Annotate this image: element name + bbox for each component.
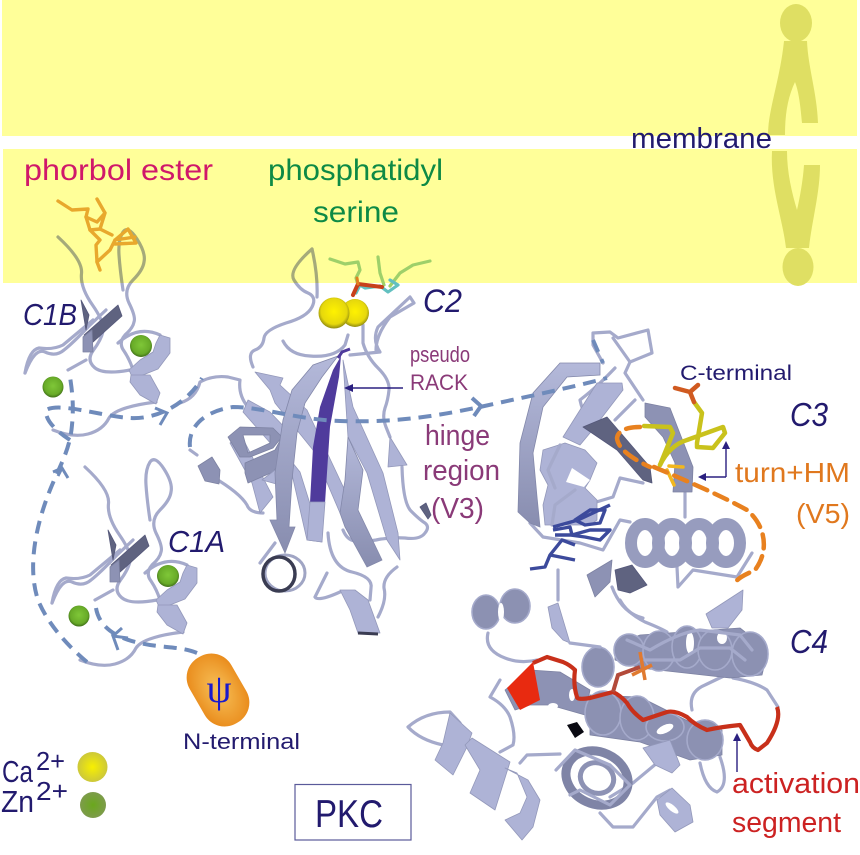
central strand lower: [343, 360, 400, 560]
N-terminal pseudosubstrate capsule: ψ: [206, 666, 232, 711]
activation segment: [507, 652, 778, 750]
C-terminal tail: [644, 385, 725, 485]
domain C3: [518, 330, 693, 569]
kinase N-lobe coils: [540, 443, 597, 525]
bottom end-on helix: [556, 741, 637, 815]
label: activation segment: [732, 768, 860, 839]
label: hinge region V3: [423, 420, 500, 525]
label: hinge region V3: hinge: [425, 420, 490, 452]
domain C1B: [25, 230, 170, 435]
label: C2: C2: [423, 283, 462, 319]
arrow strand right: [388, 437, 407, 467]
top left helix: [472, 589, 600, 647]
label: phosphatidyl serine: phosphatidyl: [268, 154, 443, 187]
legend: Ca and Zn ions: 2+: [36, 746, 65, 776]
turn and HM pointer arrows: [698, 441, 730, 481]
zinc ions: [68, 565, 179, 626]
dark strand: [583, 417, 652, 483]
left lower helix: [435, 713, 540, 840]
label: phorbol ester: phorbol ester: [24, 154, 213, 187]
phospholipid head groups and tails: [768, 4, 820, 286]
label: pseudo RACK: [410, 342, 470, 395]
black strand: [567, 722, 584, 738]
left helix: [228, 427, 282, 513]
label: C-terminal: C-terminal: [680, 362, 792, 385]
arched strand: [270, 356, 338, 553]
label: turn+HM V5: [735, 457, 850, 529]
C1A domain: [52, 460, 197, 665]
N-terminal pseudosubstrate capsule: [178, 645, 258, 735]
label: C1B: C1B: [23, 297, 77, 332]
big alpha helix: [631, 524, 740, 562]
bottom coil ring: [263, 555, 305, 591]
membrane bands: [2, 0, 857, 283]
ATP ligand: [530, 505, 610, 569]
phosphatidylserine molecule: [330, 257, 430, 295]
legend: Ca and Zn ions: 2+: [36, 776, 68, 806]
label: turn+HM V5: turn+HM: [735, 457, 850, 488]
legend: Ca and Zn ions: [1, 746, 108, 819]
bottom coil: [340, 590, 380, 634]
label: phosphatidyl serine: [268, 154, 443, 229]
label: N-terminal: N-terminal: [183, 729, 300, 754]
label: phosphatidyl serine: serine: [313, 196, 399, 229]
calcium ions: [318, 298, 369, 328]
upper helix: [582, 590, 768, 687]
label: turn+HM V5: (V5): [796, 498, 850, 529]
label: activation segment: activation: [732, 768, 860, 800]
lower right helix: [643, 740, 693, 832]
label: membrane: membrane: [631, 123, 772, 155]
label: C4: C4: [790, 623, 828, 660]
PKC title box: PKC: [315, 793, 383, 836]
label: pseudo RACK: RACK: [410, 370, 468, 395]
domain C2: [180, 249, 431, 634]
pseudo RACK strand: [310, 356, 341, 503]
PKC title box: [295, 784, 411, 840]
legend: Ca and Zn ions: Zn: [1, 784, 34, 819]
middle alpha helix: [505, 670, 723, 760]
small strand: [198, 457, 220, 484]
label: C3: C3: [790, 396, 829, 433]
zinc ions: [42, 335, 152, 398]
label: hinge region V3: (V3): [431, 493, 484, 525]
left rear strand: [255, 372, 348, 513]
phorbol ester molecule: [58, 199, 136, 270]
label: activation segment: segment: [732, 807, 841, 839]
lower strands: [288, 457, 322, 542]
turn strand: [645, 403, 693, 492]
label: hinge region V3: region: [423, 455, 500, 487]
flexible linker dashes: [33, 340, 607, 662]
V5 orange linker: [617, 427, 764, 587]
activation segment pointer arrow: [733, 733, 741, 772]
curved beta strand: [518, 363, 600, 527]
label: pseudo RACK: pseudo: [410, 342, 470, 367]
legend: Ca and Zn ions: Ca: [2, 754, 34, 789]
label: C1A: C1A: [168, 524, 225, 559]
pseudo RACK pointer arrow: [344, 384, 403, 392]
small strands: [587, 560, 647, 597]
domain C4: [408, 524, 778, 840]
